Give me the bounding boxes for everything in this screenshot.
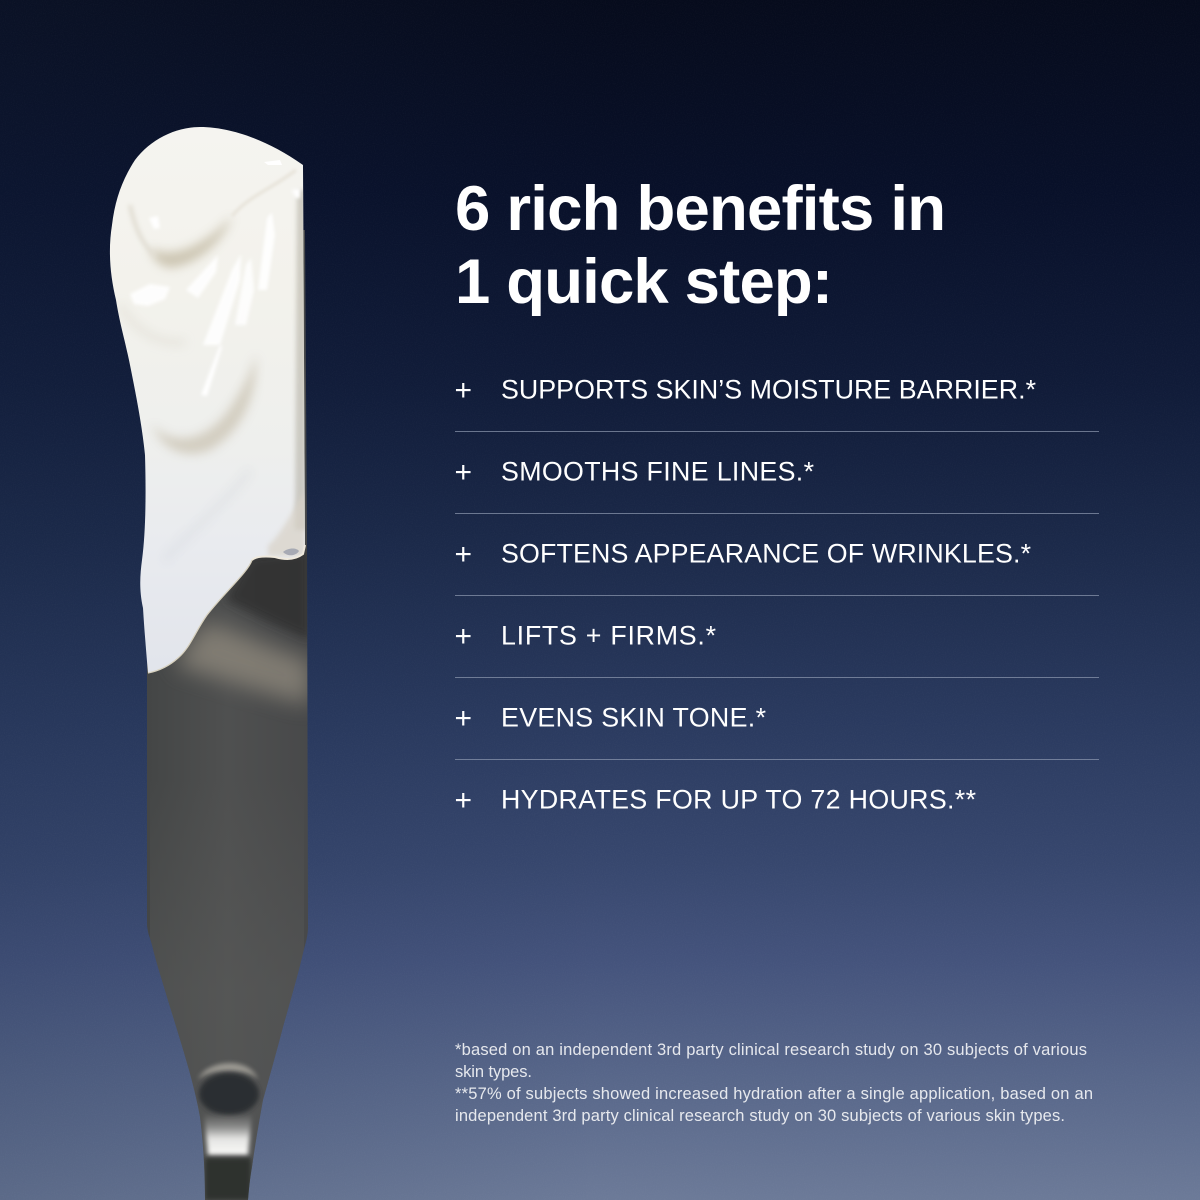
soft marbling xyxy=(165,470,250,560)
benefit 4: + xyxy=(454,620,472,653)
benefit 2: + xyxy=(454,456,472,489)
footnotes: **57% of subjects showed increased hydration after a single application, based on an xyxy=(455,1085,1093,1103)
title: 1 quick step: xyxy=(455,247,833,317)
benefit 6: HYDRATES FOR UP TO 72 HOURS.** xyxy=(501,784,977,814)
benefit 2: SMOOTHS FINE LINES.* xyxy=(501,456,815,486)
benefit 1: SUPPORTS SKIN’S MOISTURE BARRIER.* xyxy=(501,374,1037,404)
benefit 6: + xyxy=(454,784,472,817)
upper fold shadow xyxy=(150,216,232,268)
benefit 5: + xyxy=(454,702,472,735)
benefit 3: SOFTENS APPEARANCE OF WRINKLES.* xyxy=(501,538,1032,568)
benefit 5: EVENS SKIN TONE.* xyxy=(501,702,767,732)
benefit 4: LIFTS + FIRMS.* xyxy=(501,620,717,650)
warm reflection band xyxy=(175,622,310,705)
lower fold shadow xyxy=(152,355,256,454)
gloss highlights xyxy=(130,160,300,396)
benefit 1: + xyxy=(454,374,472,407)
title: 6 rich benefits in xyxy=(455,174,946,244)
benefits list xyxy=(454,374,1037,817)
footnotes: independent 3rd party clinical research study on 30 subjects of various skin types. xyxy=(455,1107,1065,1125)
spatula blade xyxy=(140,220,315,1200)
footnotes: skin types. xyxy=(455,1063,532,1081)
footnotes xyxy=(455,1041,1093,1125)
corner detail xyxy=(268,490,305,556)
title xyxy=(455,174,946,317)
benefit 3: + xyxy=(454,538,472,571)
cream dollop xyxy=(110,127,306,674)
right edge shade xyxy=(295,190,306,530)
neck reflections xyxy=(198,1063,258,1080)
footnotes: *based on an independent 3rd party clinical research study on 30 subjects of various xyxy=(455,1041,1087,1059)
dark reflection under cream xyxy=(225,550,310,640)
